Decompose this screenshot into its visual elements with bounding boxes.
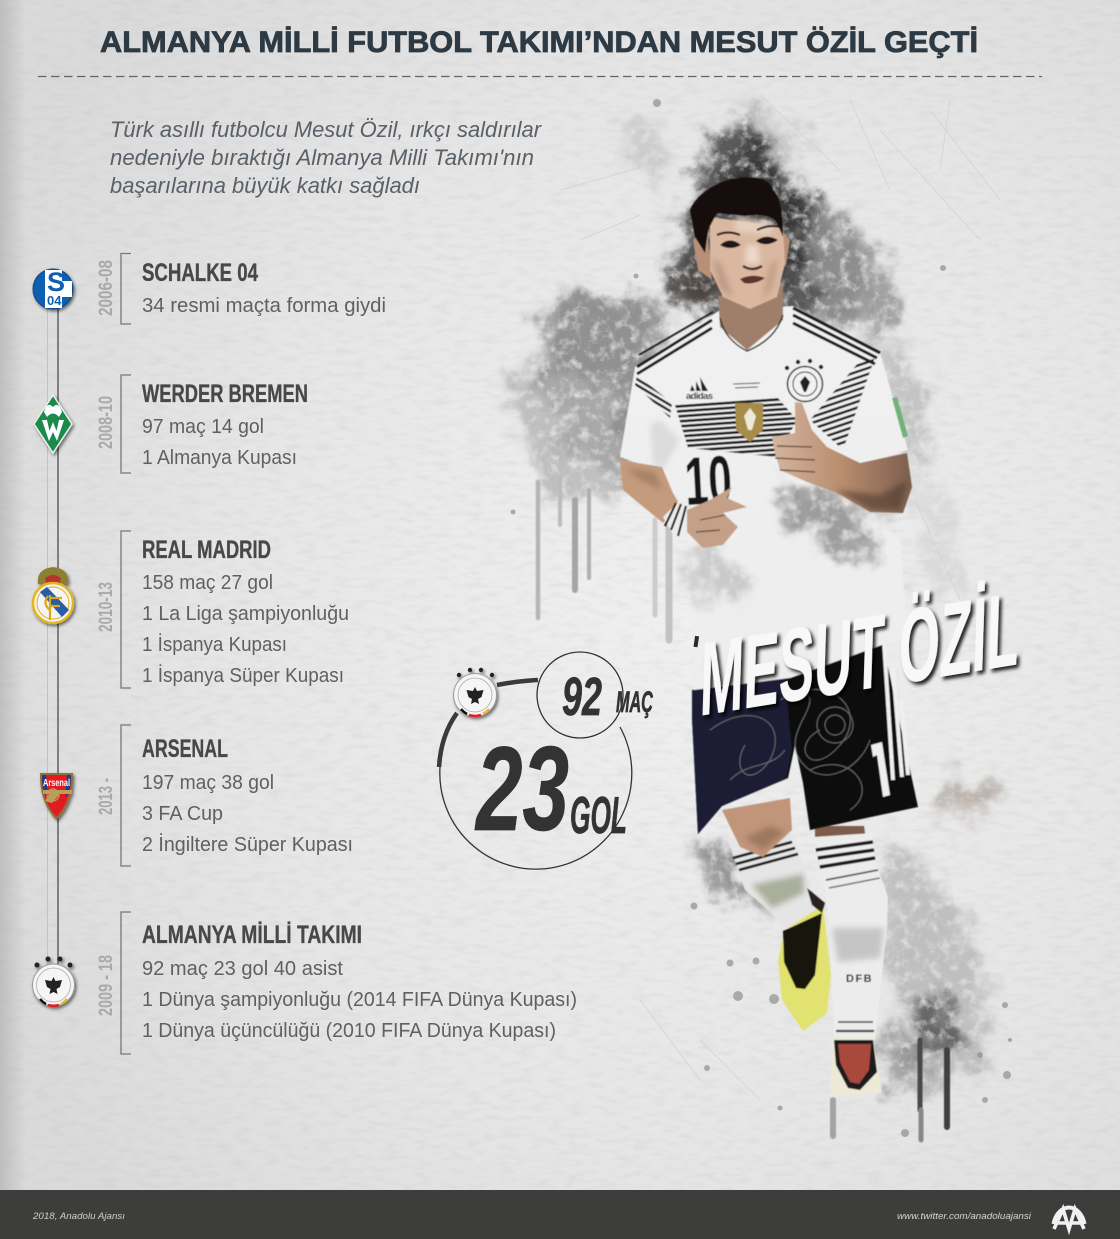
stat: 23 goals: GOL <box>570 787 627 845</box>
entry: Real Madrid: 2010-13 <box>96 582 117 632</box>
icon: Werder Bremen crest <box>34 395 72 453</box>
entry: Schalke 04 <box>96 254 386 324</box>
entry: Almanya Milli Takimi: 92 maç 23 gol 40 asist <box>142 958 343 980</box>
adidas logo: adidas <box>686 391 713 402</box>
credit: 2018, Anadolu Ajansı <box>32 1211 125 1222</box>
entry: Almanya Milli Takimi: ALMANYA MİLLİ TAKIMI <box>142 921 362 949</box>
entry: Arsenal: 2 İngiltere Süper Kupası <box>142 833 353 856</box>
arms <box>620 402 912 548</box>
small circle <box>537 652 623 738</box>
intro paragraph <box>110 117 543 198</box>
icon: Schalke 04 crest: S <box>47 267 65 297</box>
entry: Arsenal: ARSENAL <box>142 735 228 763</box>
entry: Werder Bremen <box>96 375 308 473</box>
shirt number: 10 <box>683 442 734 520</box>
stat: 92 matches <box>562 667 653 727</box>
icon: German FA crest (timeline) <box>32 956 74 1006</box>
stat: 92 matches: 92 <box>562 667 602 727</box>
icon: Real Madrid crest <box>33 567 73 623</box>
entry: Werder Bremen: 2008-10 <box>96 396 117 449</box>
shading under arm <box>690 486 872 605</box>
right leg <box>814 826 888 1097</box>
entry: Arsenal: 3 FA Cup <box>142 803 223 825</box>
entry: Real Madrid: 1 La Liga şampiyonluğu <box>142 603 349 625</box>
entry: Schalke 04: 34 resmi maçta forma giydi <box>142 295 386 317</box>
entry: Real Madrid: 1 İspanya Süper Kupası <box>142 664 344 687</box>
national team stats badge <box>439 652 653 869</box>
entry: Real Madrid <box>96 531 349 688</box>
icon: Schalke 04 crest <box>33 267 73 309</box>
entry: Werder Bremen: 1 Almanya Kupası <box>142 447 297 469</box>
icon: German FA crest <box>454 668 496 716</box>
icon: Arsenal crest: Arsenal <box>43 778 70 789</box>
nose and mouth <box>743 266 762 269</box>
entry: Schalke 04: 2006-08 <box>96 260 117 316</box>
entry: Almanya Milli Takimi: 1 Dünya şampiyonluğu (2014 FIFA Dünya Kupası) <box>142 989 577 1011</box>
intro paragraph: nedeniyle bıraktığı Almanya Milli Takımı'nın <box>110 145 534 170</box>
twitter url: www.twitter.com/anadoluajansi <box>897 1211 1032 1222</box>
ink specks and scratches <box>510 95 1012 1137</box>
watercolour ink splashes behind the player <box>505 100 1003 1095</box>
left leg <box>722 798 831 1031</box>
entry: Almanya Milli Takimi: 1 Dünya üçüncülüğü (2010 FIFA Dünya Kupası) <box>142 1020 556 1042</box>
entry: Real Madrid: 158 maç 27 gol <box>142 572 273 594</box>
timeline rail <box>48 300 58 965</box>
icon: Arsenal crest <box>40 773 73 820</box>
shoulder stripes <box>637 308 880 374</box>
title: ALMANYA MİLLİ FUTBOL TAKIMI’NDAN MESUT ÖZİL GEÇTİ <box>100 26 978 59</box>
entry: Real Madrid: REAL MADRID <box>142 536 271 564</box>
jersey <box>620 285 908 690</box>
entry: Almanya Milli Takimi <box>96 912 577 1054</box>
ink drips <box>538 480 947 1140</box>
German FA crest on jersey <box>788 366 822 402</box>
entry: Arsenal: 197 maç 38 gol <box>142 772 274 794</box>
entry: Arsenal: 2013 - <box>96 778 117 815</box>
shorts <box>692 640 918 834</box>
icon: Anadolu Agency logo <box>1054 1207 1084 1229</box>
thick arc <box>439 680 538 767</box>
stat: 23 goals: 23 <box>475 722 569 856</box>
eyes and brows <box>720 237 778 248</box>
icon: Schalke 04 crest: 04 <box>47 293 62 308</box>
entry: Almanya Milli Takimi: 2009 - 18 <box>96 955 117 1016</box>
entry: Arsenal <box>96 725 353 866</box>
neck and collar <box>718 285 783 350</box>
entry: Real Madrid: 1 İspanya Kupası <box>142 633 287 656</box>
entry: Schalke 04: SCHALKE 04 <box>142 259 258 287</box>
gold FIFA badge <box>735 403 763 442</box>
match text on shirt <box>733 383 760 388</box>
big circle <box>440 727 632 869</box>
intro paragraph: Türk asıllı futbolcu Mesut Özil, ırkçı saldırılar <box>110 117 543 142</box>
player illustration: Mesut Özil <box>620 177 918 1097</box>
sock text: DFB <box>846 973 873 985</box>
head <box>690 177 790 309</box>
entry: Werder Bremen: WERDER BREMEN <box>142 380 308 408</box>
intro paragraph: başarılarına büyük katkı sağladı <box>110 173 420 198</box>
chest stripes <box>674 398 796 457</box>
name: MESUT ÖZİL <box>694 571 1021 739</box>
hair <box>690 177 783 253</box>
footer bar <box>0 1190 1120 1239</box>
stat: 92 matches: MAÇ <box>616 686 653 719</box>
entry: Werder Bremen: 97 maç 14 gol <box>142 416 264 438</box>
